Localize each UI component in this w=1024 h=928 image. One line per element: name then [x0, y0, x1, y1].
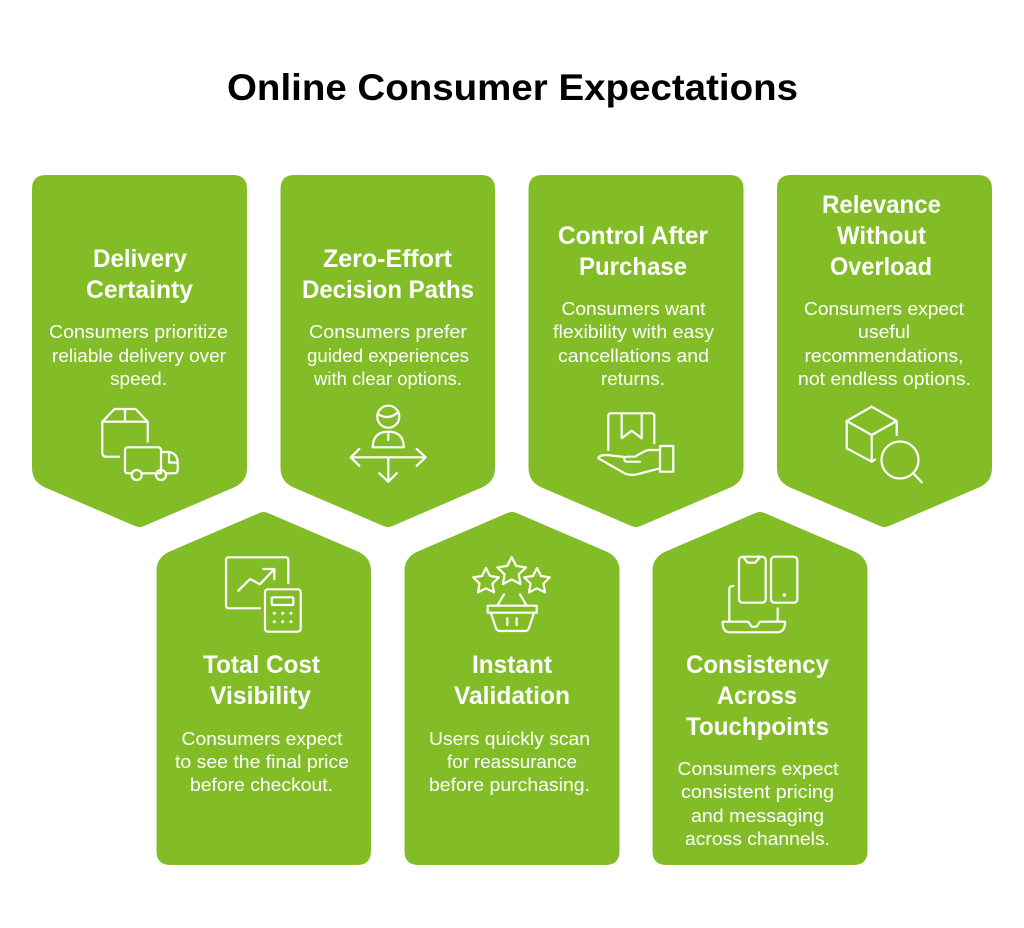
panel shape	[156, 512, 371, 865]
heading: Delivery	[93, 245, 187, 273]
panel: Total Cost Visibility	[156, 512, 371, 865]
panel: Control After Purchase	[528, 175, 744, 527]
description	[307, 321, 469, 389]
heading	[822, 191, 941, 281]
heading: Zero-Effort	[323, 245, 453, 273]
description: Consumers expect	[182, 728, 342, 749]
description	[678, 758, 838, 849]
heading: Relevance	[822, 191, 941, 219]
panel: Consistency Across Touchpoints	[652, 512, 868, 865]
heading: Instant	[472, 651, 553, 679]
description: flexibility with easy	[553, 321, 715, 342]
description: guided experiences	[307, 345, 469, 366]
panel shape	[652, 512, 868, 865]
description	[798, 298, 971, 389]
icon: phone, tablet and laptop	[723, 557, 797, 632]
panel: Delivery Certainty	[32, 175, 247, 527]
icon: chart and calculator	[226, 557, 301, 632]
description: Consumers expect	[804, 298, 964, 319]
description: to see the final price	[175, 751, 349, 772]
heading: Total Cost	[203, 651, 321, 679]
icon: person with three direction arrows	[351, 406, 426, 482]
description: returns.	[601, 368, 665, 389]
heading	[454, 651, 570, 710]
heading: Control After	[558, 222, 708, 250]
description	[175, 728, 349, 795]
panel: Instant Validation	[404, 512, 620, 865]
heading	[558, 222, 708, 281]
description: consistent pricing	[681, 781, 834, 802]
description	[429, 728, 590, 795]
heading: Validation	[454, 682, 570, 710]
description: across channels.	[685, 828, 830, 849]
heading: Touchpoints	[686, 713, 829, 741]
icon: hand holding package	[598, 413, 673, 475]
heading: Across	[717, 682, 797, 710]
panel shape	[404, 512, 620, 865]
icon: cube with magnifying glass	[847, 407, 922, 482]
heading: Decision Paths	[302, 276, 474, 304]
description: before checkout.	[190, 774, 333, 795]
description: before purchasing.	[429, 774, 590, 795]
panel shape	[528, 175, 744, 527]
heading	[86, 245, 193, 304]
panel: Zero-Effort Decision Paths	[280, 175, 495, 527]
description: useful	[858, 321, 910, 342]
panel shape	[32, 175, 247, 527]
heading: Certainty	[86, 276, 193, 304]
description: Users quickly scan	[429, 728, 590, 749]
heading: Consistency	[686, 651, 829, 679]
description: recommendations,	[804, 345, 964, 366]
description	[49, 321, 228, 389]
description	[553, 298, 715, 389]
heading: Visibility	[210, 682, 311, 710]
heading: Without	[837, 222, 927, 250]
description: reliable delivery over	[52, 345, 226, 366]
description: Consumers prioritize	[49, 321, 228, 342]
icon: three stars above basket	[473, 557, 550, 631]
description: Consumers expect	[678, 758, 838, 779]
title: Online Consumer Expectations	[227, 67, 798, 108]
heading: Overload	[830, 253, 932, 281]
description: and messaging	[691, 805, 824, 826]
panel: Relevance Without Overload	[777, 175, 992, 527]
description: not endless options.	[798, 368, 971, 389]
panel shape	[280, 175, 495, 527]
description: speed.	[110, 368, 167, 389]
description: Consumers want	[562, 298, 706, 319]
icon: box and delivery truck	[102, 409, 178, 480]
panel shape	[777, 175, 992, 527]
description: with clear options.	[313, 368, 462, 389]
description: Consumers prefer	[309, 321, 467, 342]
heading	[302, 245, 474, 304]
description: cancellations and	[558, 345, 709, 366]
heading	[686, 651, 829, 741]
heading	[203, 651, 321, 710]
description: for reassurance	[447, 751, 577, 772]
heading: Purchase	[579, 253, 687, 281]
